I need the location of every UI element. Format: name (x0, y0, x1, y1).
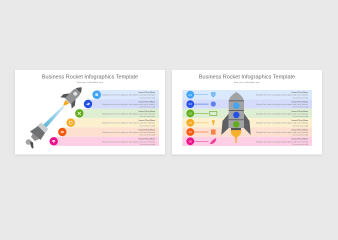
fins (221, 114, 229, 135)
band text blocks: Your text here to add (139, 143, 155, 146)
band text blocks: Insert Text Here (139, 128, 156, 131)
band text blocks: Sample text here to add your description and insert details (102, 112, 155, 115)
band text blocks: Insert Text Here (139, 100, 156, 104)
step bands (54, 90, 159, 146)
panel: right slide, vertical rocket (172, 70, 322, 154)
numbered circles (186, 91, 194, 145)
band text blocks (102, 91, 156, 146)
band text blocks: Your text here to add (292, 96, 308, 99)
band text blocks: Sample text here to add your description and insert details (256, 131, 308, 134)
band text blocks: Insert Text Here (139, 119, 156, 122)
band text blocks: Your text here to add (292, 115, 308, 118)
band text blocks: Your text here to add (292, 134, 308, 137)
numbered circles: 05 (189, 130, 192, 134)
band text blocks: Insert Text Here (139, 138, 156, 141)
panel: left slide, diagonal rocket (15, 70, 165, 154)
icon: light beam trail (42, 106, 64, 128)
step circles with icons (50, 90, 101, 146)
band text blocks: Insert Text Here (139, 91, 156, 94)
band text blocks: Sample text here to add your description and insert details (102, 94, 155, 97)
fins (60, 90, 71, 100)
band text blocks: Sample text here to add your description and insert details (102, 122, 155, 125)
band text blocks: Insert Text Here (292, 110, 309, 113)
band text blocks: Insert Text Here (292, 128, 309, 131)
heading: left slide title: Business Rocket Infographics Template (42, 75, 138, 81)
band text blocks: Your text here to add (139, 134, 155, 137)
icon: diagonal rocket (58, 82, 87, 111)
topic icons (210, 92, 217, 144)
band text blocks: Insert Text Here (292, 138, 309, 141)
icon: launcher cannon (26, 122, 48, 148)
connector lines (192, 95, 208, 141)
body (65, 84, 85, 104)
icon: vertical rocket (221, 92, 251, 143)
band text blocks: Sample text here to add your description and insert details (102, 131, 155, 134)
horizontal bands (182, 90, 312, 146)
band text blocks: Sample text here to add your description and insert details (102, 103, 155, 106)
flame (230, 130, 242, 143)
band text blocks: Sample text here to add your description and insert details (256, 112, 308, 115)
right slide subtitle: Enter your subheadline here (234, 81, 261, 84)
body (229, 92, 244, 128)
band text blocks: Your text here to add (292, 124, 308, 127)
band text blocks: Insert Text Here (292, 91, 309, 94)
numbered circles: 02 (189, 102, 192, 106)
band text blocks: Your text here to add (139, 96, 155, 99)
band text blocks: Your text here to add (139, 115, 155, 118)
band text blocks: Sample text here to add your description and insert details (256, 140, 308, 143)
nozzle (231, 128, 241, 130)
flame (61, 100, 69, 108)
band text blocks: Insert Text Here (292, 100, 309, 104)
left slide subtitle: Enter your subheadline here (77, 81, 104, 84)
band text blocks: Your text here to add (139, 106, 155, 109)
windows (233, 102, 240, 109)
band text blocks: Sample text here to add your description and insert details (256, 122, 308, 125)
band text blocks: Your text here to add (139, 124, 155, 127)
band text blocks: Sample text here to add your description and insert details (256, 103, 308, 106)
band text blocks: Insert Text Here (292, 119, 309, 122)
porthole (73, 91, 78, 96)
numbered circles: 01 (189, 93, 192, 97)
band text blocks: Sample text here to add your description and insert details (256, 94, 308, 97)
numbered circles: 04 (189, 121, 192, 125)
band text blocks: Insert Text Here (139, 110, 156, 113)
band text blocks: Your text here to add (292, 106, 308, 109)
body separators (229, 100, 244, 120)
band text blocks: Your text here to add (292, 143, 308, 146)
band text blocks (256, 91, 309, 146)
nose (76, 85, 84, 93)
numbered circles: 03 (189, 112, 192, 116)
band text blocks: Sample text here to add your description and insert details (102, 140, 155, 143)
numbered circles: 06 (189, 139, 192, 143)
heading: right slide title: Business Rocket Infographics Template (199, 75, 295, 81)
